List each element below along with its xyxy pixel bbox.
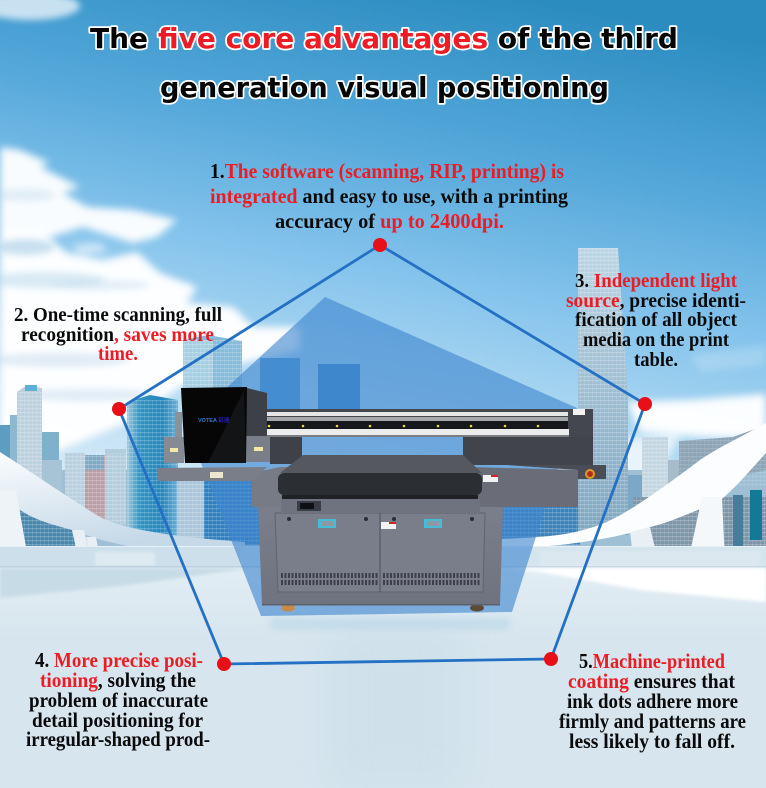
- advantage 4 text: tioning, solving the: [40, 668, 196, 692]
- advantage 4 text: irregular-shaped prod-: [26, 727, 210, 751]
- printer: [158, 387, 606, 612]
- advantage 1 text: 1.The software (scanning, RIP, printing) is: [210, 159, 564, 183]
- advantage 5 text: ink dots adhere more: [567, 689, 738, 713]
- advantage 3 text: table.: [634, 349, 678, 371]
- advantage 1 text: integrated and easy to use, with a printing: [210, 184, 568, 208]
- advantage 3 text: fication of all object: [575, 309, 737, 331]
- advantage 3 text: [566, 270, 746, 371]
- advantage 4 text: 4. More precise posi-: [35, 648, 203, 672]
- advantage 1 text: accuracy of up to 2400dpi.: [275, 209, 504, 233]
- advantage 4 text: problem of inaccurate: [29, 688, 208, 712]
- advantage 5 text: 5.Machine-printed: [579, 649, 725, 673]
- background: reflective floor: [0, 546, 766, 788]
- advantage 1 text: [210, 159, 568, 233]
- advantage 3 text: 3. Independent light: [575, 270, 737, 292]
- title: [90, 22, 678, 104]
- printer: screen logo: VOTEA 彩速: [198, 416, 230, 424]
- advantage 2 text: recognition, saves more: [21, 324, 214, 346]
- printer: gantry: [255, 409, 593, 465]
- advantage 4 text: detail positioning for: [32, 708, 203, 732]
- translucent blue pentagon behind printer: [186, 297, 577, 616]
- title: generation visual positioning: [160, 71, 609, 104]
- advantage 2 text: time.: [98, 343, 138, 365]
- advantage 5 text: less likely to fall off.: [569, 729, 735, 753]
- advantage 3 text: media on the print: [583, 329, 729, 351]
- advantage 2 text: [14, 304, 222, 365]
- printer: cabinet: [258, 505, 503, 612]
- advantage 5 text: coating ensures that: [568, 669, 736, 693]
- advantage 3 text: source, precise identi-: [566, 290, 746, 312]
- background: arched walkways: [0, 423, 766, 562]
- connecting pentagon lines and dots: [112, 238, 652, 671]
- background: sky with clouds: [0, 0, 766, 560]
- background: city skyline: [0, 248, 766, 549]
- advantage 4 text: [26, 648, 210, 751]
- advantage 5 text: [559, 649, 746, 753]
- printer: conveyor table: [252, 455, 606, 513]
- title: The five core advantages of the third: [90, 22, 678, 55]
- advantage 2 text: 2. One-time scanning, full: [14, 304, 222, 326]
- printer: control unit: [158, 387, 270, 481]
